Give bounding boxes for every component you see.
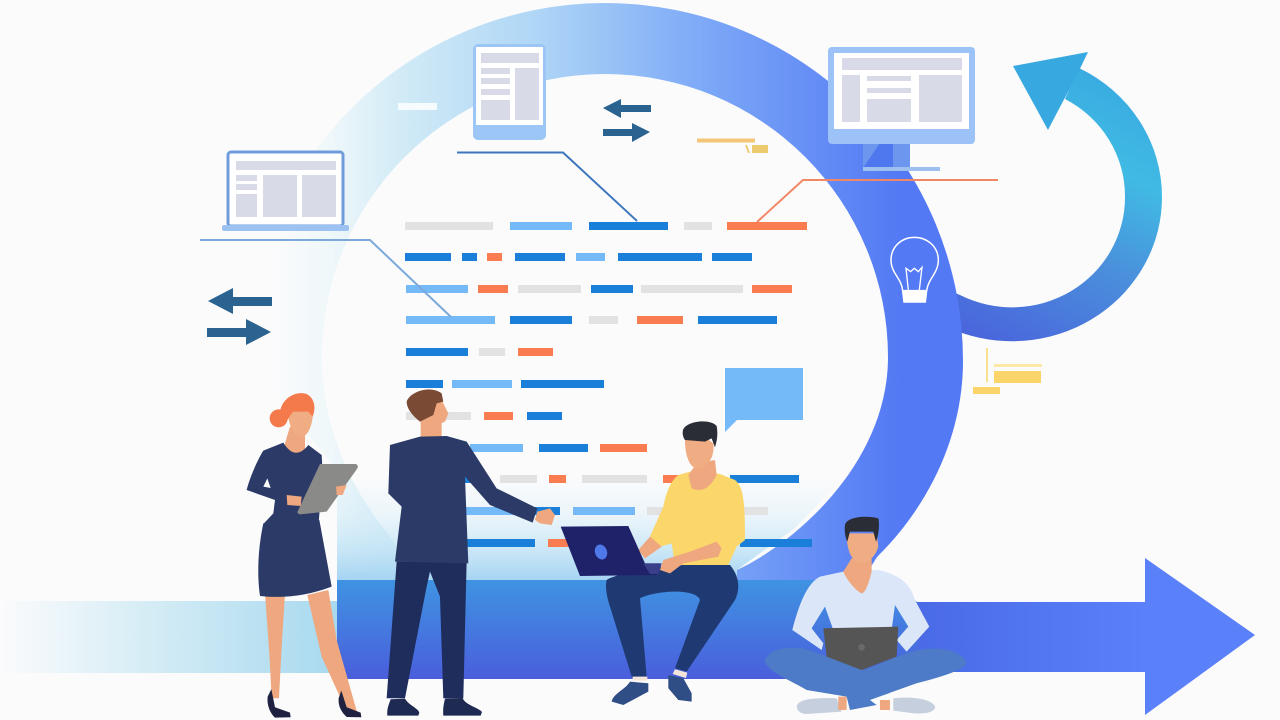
figure: man sitting cross-legged with laptop [765,517,967,714]
figure: man in yellow with laptop [561,421,745,705]
decorative dash on ring [398,103,437,110]
icon: light bulb [891,237,938,302]
small yellow marks right [973,348,1042,394]
icon: laptop with layout [222,152,349,231]
circular cycle ring [247,3,963,600]
timeline arrow head [917,558,1255,715]
left fading band of timeline arrow [0,601,337,673]
connector line: laptop [200,240,451,317]
connector line: tablet [457,152,637,221]
curved return arrow [950,52,1162,341]
figure: man pointing [387,390,555,716]
speech bubble [725,368,803,432]
connector line: monitor [757,180,998,222]
arrows: exchange top centre [603,99,651,142]
backlog task bars [405,222,812,547]
figure: woman with tablet [247,393,361,718]
small yellow marks top [697,138,768,153]
icon: tablet with layout [473,44,546,140]
arrows: exchange left [207,288,272,345]
icon: monitor with layout [828,47,975,171]
fade at base of ring [337,478,842,581]
main timeline bar [337,580,917,679]
